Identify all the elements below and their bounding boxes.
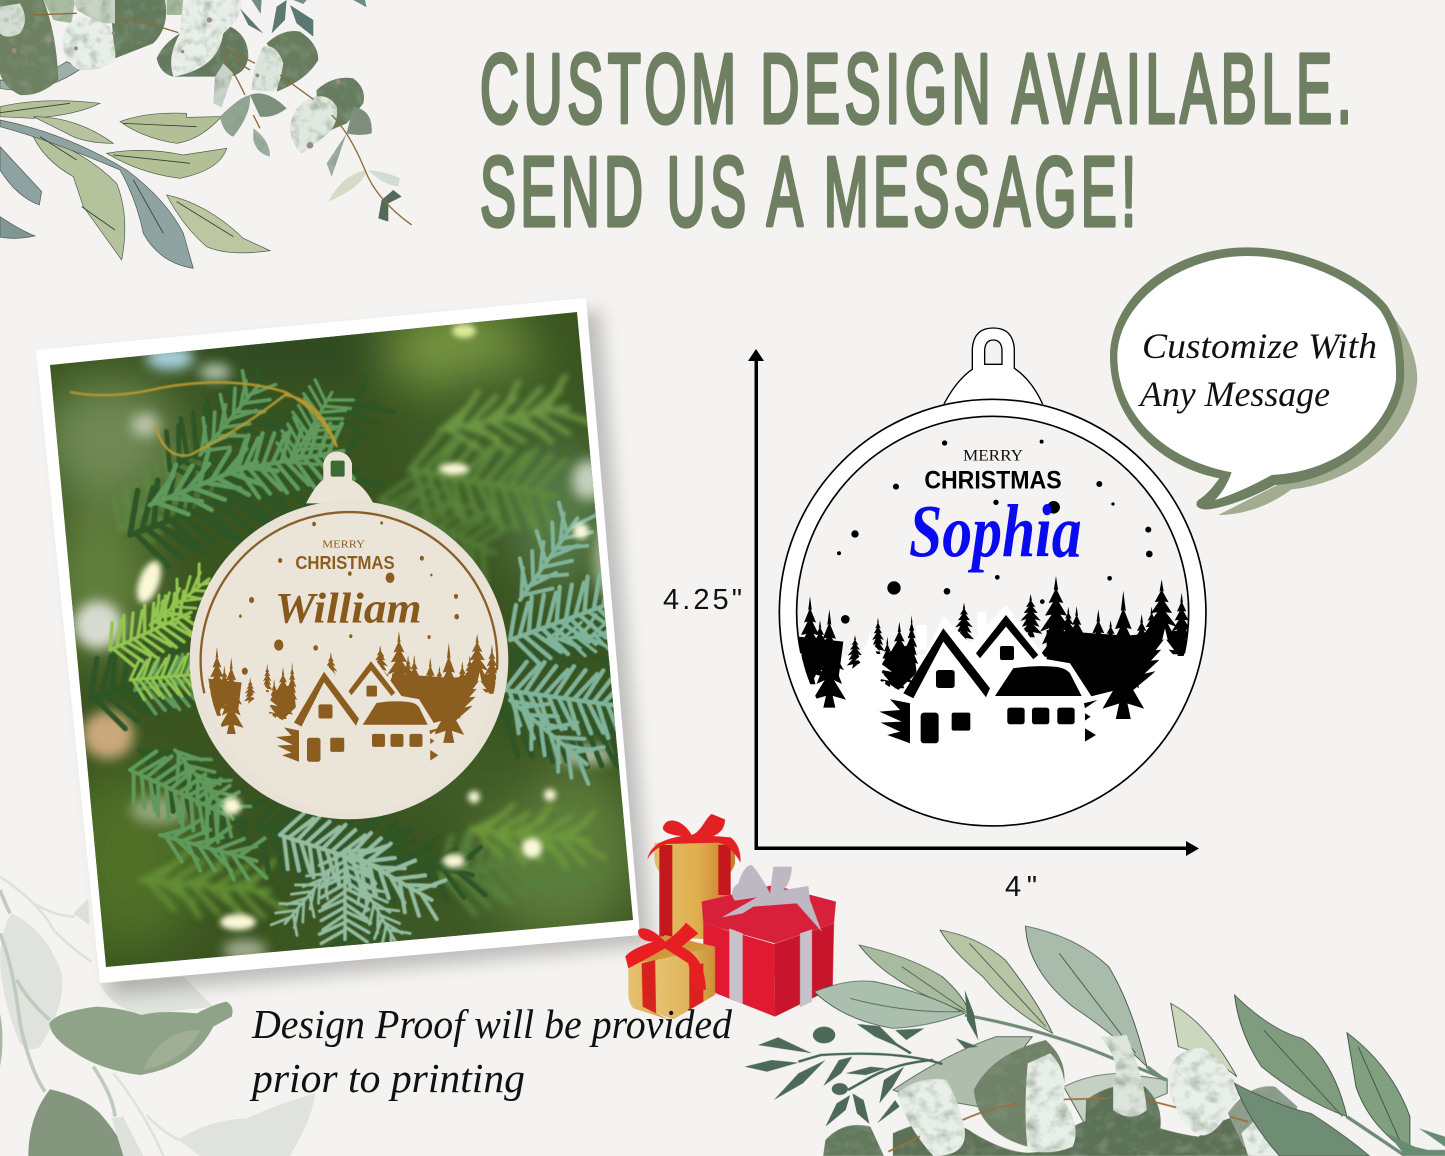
pale needles bbox=[269, 812, 448, 946]
title: CUSTOM DESIGN AVAILABLE. bbox=[480, 33, 1352, 144]
photo frame bbox=[36, 298, 640, 983]
gold string bbox=[70, 382, 337, 456]
forest scene bbox=[790, 576, 1200, 822]
snow dots bbox=[837, 440, 1153, 624]
speech bubble bbox=[1110, 247, 1417, 515]
bubble fill bbox=[1117, 256, 1396, 500]
small gold gift with red ribbon bbox=[625, 923, 715, 1020]
bubble shadow bbox=[1218, 290, 1417, 515]
foliage: bottom left faded leaves bbox=[0, 877, 315, 1156]
gift boxes bbox=[625, 814, 836, 1020]
bubble text bbox=[1138, 326, 1377, 414]
bubble text: Customize With bbox=[1142, 326, 1377, 366]
long sage leaves bbox=[814, 926, 1410, 1153]
ornament tab bbox=[306, 452, 373, 503]
dimension arrows bbox=[748, 349, 1199, 856]
ornament disc bbox=[190, 501, 508, 819]
caption bbox=[249, 1001, 732, 1101]
caption: Design Proof will be provided bbox=[251, 1001, 732, 1047]
wooden ornament: CHRISTMAS bbox=[295, 552, 395, 573]
ornament text: MERRY bbox=[322, 539, 365, 550]
diagram: ornament line art bbox=[779, 328, 1206, 826]
house scene bbox=[879, 605, 1097, 753]
title bbox=[480, 33, 1352, 247]
eucalyptus leaves bbox=[0, 0, 372, 177]
width label: 4" bbox=[1005, 871, 1037, 903]
blurred lights bbox=[74, 346, 626, 960]
gold cylinder gift bbox=[647, 814, 741, 940]
ornament outer ring bbox=[779, 399, 1206, 826]
bright needles bbox=[108, 562, 212, 702]
wooden ornament: William bbox=[275, 585, 422, 633]
ornament tab outline bbox=[944, 328, 1043, 404]
bright lights bbox=[132, 324, 589, 930]
dark needles bbox=[88, 368, 620, 947]
panel: framed ornament photo bbox=[36, 298, 651, 983]
ornament house bbox=[276, 653, 439, 770]
red gift with silver ribbon bbox=[702, 865, 836, 1017]
olive and blue-grey leaves bbox=[0, 62, 270, 268]
teal needles bbox=[505, 500, 616, 787]
title: SEND US A MESSAGE! bbox=[480, 136, 1136, 247]
in focus pine branches bbox=[88, 368, 620, 947]
mid needles bbox=[117, 361, 355, 888]
foliage: top left leaves bbox=[0, 0, 412, 268]
ornament trees bbox=[202, 631, 506, 823]
caption: prior to printing bbox=[249, 1055, 525, 1101]
CHRISTMAS text: CHRISTMAS bbox=[924, 466, 1062, 494]
name text: Sophia bbox=[909, 491, 1082, 574]
ornament recess edge bbox=[201, 512, 497, 693]
bubble text: Any Message bbox=[1138, 374, 1330, 414]
height label: 4.25" bbox=[663, 584, 742, 616]
photo of tree bbox=[40, 300, 651, 980]
photo shadow bbox=[50, 310, 652, 995]
inner ring upper edge bbox=[797, 416, 1189, 653]
eucalyptus leaves bbox=[823, 1035, 1302, 1156]
ornament snow dots bbox=[239, 521, 459, 675]
out of focus branches bbox=[101, 371, 609, 924]
foliage: bottom right leaves bbox=[744, 926, 1445, 1156]
bubble outline bbox=[1110, 247, 1404, 510]
left sprig bbox=[744, 990, 978, 1127]
wooden ornament bbox=[190, 452, 508, 823]
MERRY text: MERRY bbox=[963, 448, 1023, 465]
